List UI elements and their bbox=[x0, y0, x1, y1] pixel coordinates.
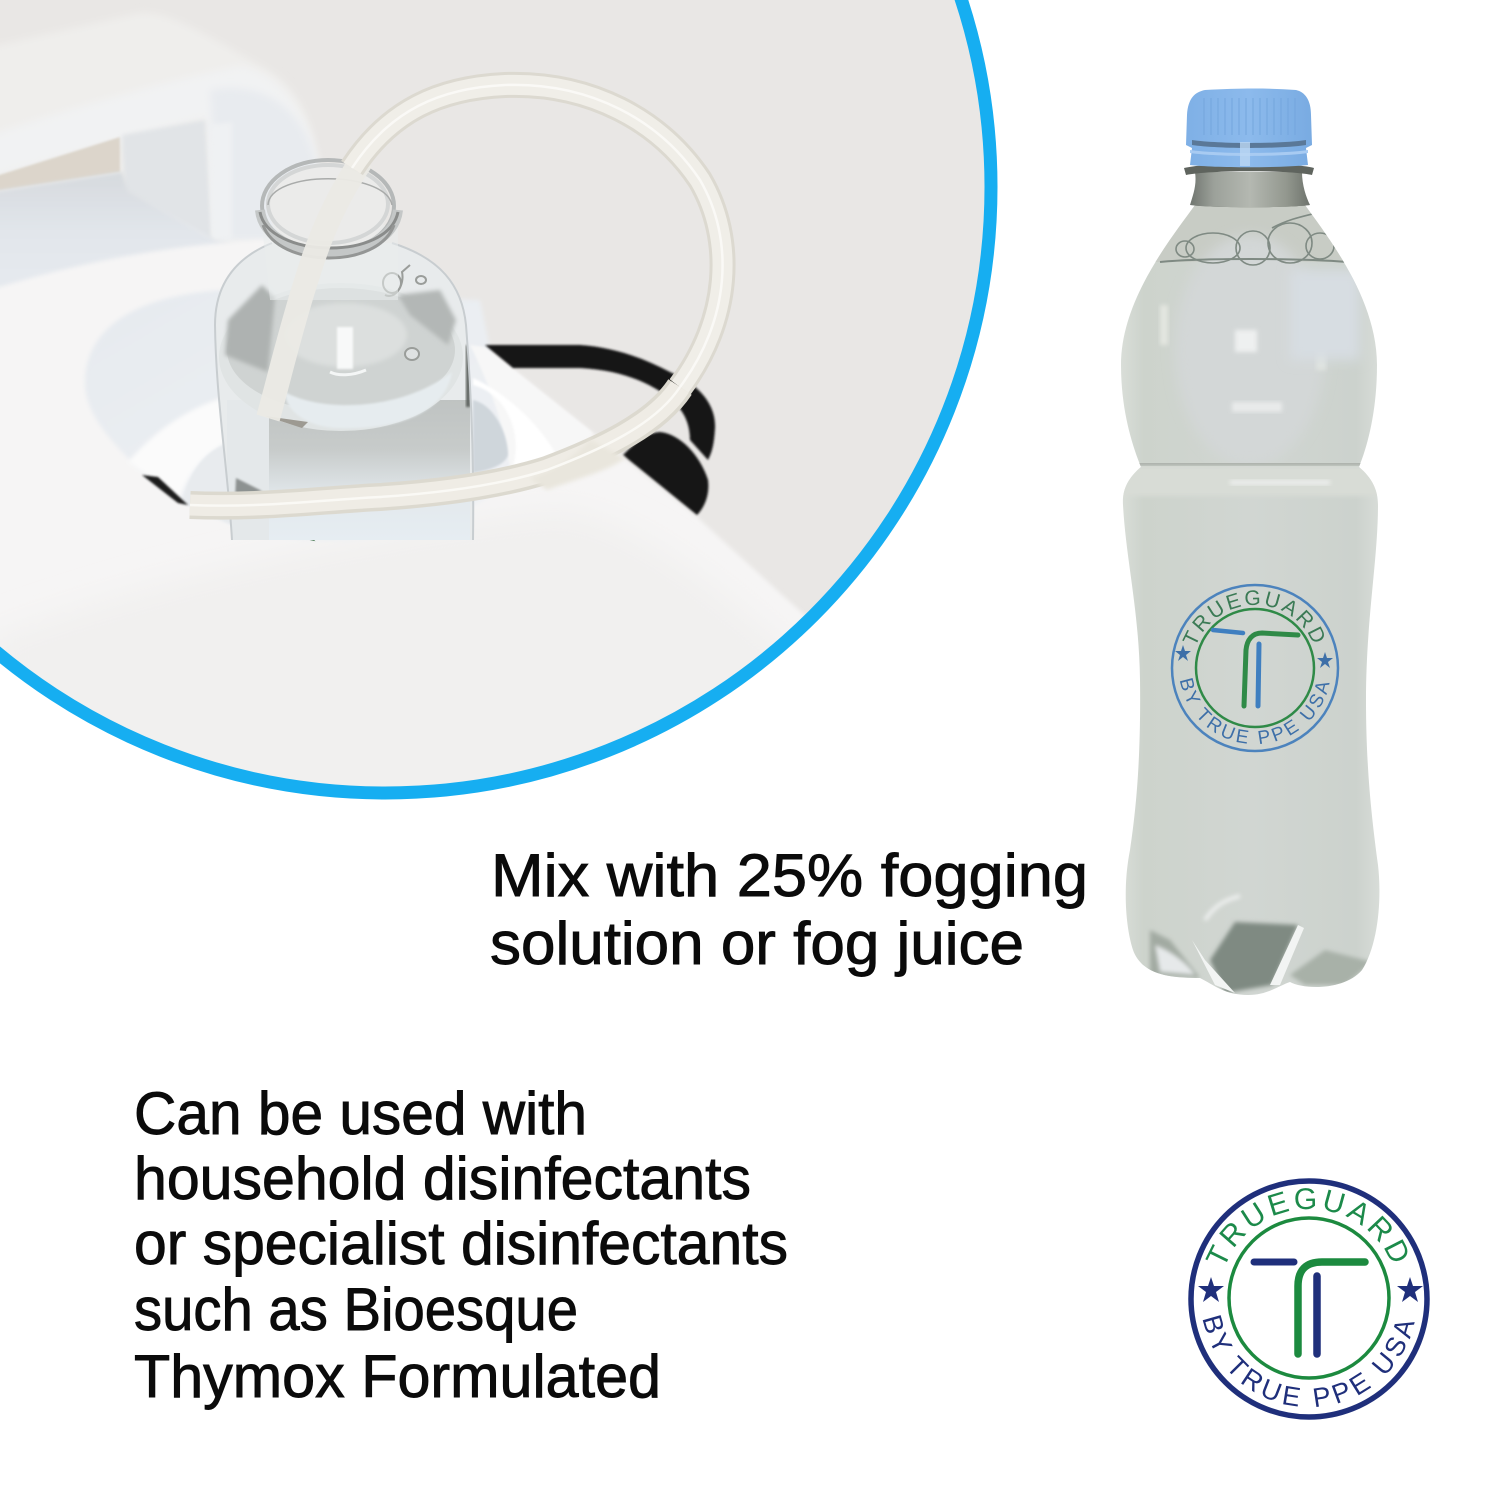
device: handle bbox=[0, 64, 318, 284]
inner tube bbox=[268, 160, 362, 418]
text: compatible disinfectants: Thymox Formulated bbox=[134, 1343, 661, 1410]
glass jar bbox=[205, 160, 485, 545]
product bottle bbox=[1121, 88, 1380, 995]
text: compatible disinfectants bbox=[134, 1080, 788, 1410]
jar neck ring bbox=[260, 160, 398, 258]
photo: fogger with solution jar in blue circle bbox=[0, 0, 1020, 830]
text: mix instruction: solution or fog juice bbox=[490, 910, 1024, 977]
bottle neck bbox=[1190, 172, 1310, 207]
TrueGuard logo badge bbox=[1188, 1178, 1430, 1420]
logo ring text top: TRUEGUARD bbox=[1205, 1188, 1408, 1262]
foam bubbles bbox=[1160, 212, 1348, 265]
bottle body bbox=[1121, 206, 1380, 995]
device: white body bbox=[0, 243, 804, 640]
device: socket recess bbox=[86, 291, 554, 524]
bottle label logo bbox=[1170, 584, 1340, 752]
bottle label logo: TRUEGUARD bbox=[1182, 590, 1324, 642]
droplets bbox=[383, 265, 426, 360]
black hose and plug bbox=[485, 345, 715, 515]
logo ring text bottom: BY TRUE PPE USA bbox=[1202, 1315, 1415, 1407]
neck flange bbox=[1184, 164, 1314, 175]
text: compatible disinfectants: or specialist disinfectants bbox=[134, 1210, 788, 1277]
logo stars bbox=[1198, 1277, 1423, 1302]
text: compatible disinfectants: Can be used with bbox=[134, 1080, 587, 1147]
neck shadow bbox=[1195, 206, 1306, 208]
cap bbox=[1186, 88, 1312, 167]
logo T mark bbox=[1254, 1262, 1365, 1354]
blue circle outline bbox=[0, 0, 991, 793]
clear tube bbox=[190, 85, 723, 506]
black socket part and label bbox=[142, 475, 313, 540]
bottle label logo: BY TRUE PPE USA bbox=[1180, 678, 1330, 744]
text: mix instruction bbox=[490, 842, 1088, 977]
text: mix instruction: Mix with 25% fogging bbox=[491, 842, 1088, 909]
text: compatible disinfectants: such as Bioesque bbox=[134, 1276, 578, 1343]
text: compatible disinfectants: household disinfectants bbox=[134, 1145, 751, 1212]
bottle base bbox=[1150, 896, 1372, 993]
jar neck bbox=[264, 242, 398, 300]
